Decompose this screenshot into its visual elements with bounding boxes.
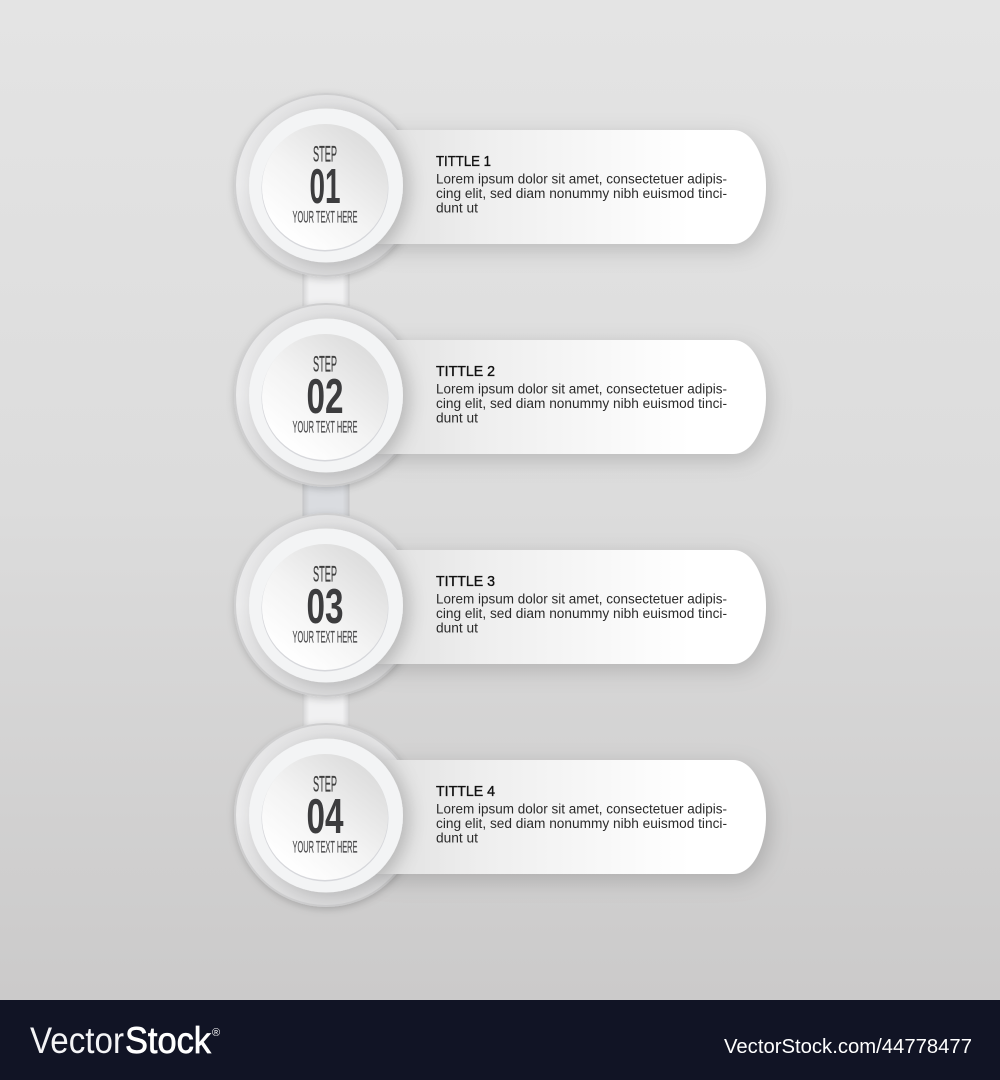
body text 4: cing elit, sed diam nonummy nibh euismod tinci- — [436, 816, 727, 831]
panel 4 — [375, 760, 766, 874]
body text 2: cing elit, sed diam nonummy nibh euismod tinci- — [436, 396, 727, 411]
footer logo: Stock — [125, 1020, 211, 1061]
step 4 — [235, 724, 766, 906]
title 4: TITTLE 4 — [436, 784, 495, 800]
middle disk 4 — [249, 738, 403, 892]
body text 2: dunt ut — [436, 410, 478, 426]
step 1: STEP — [313, 142, 337, 166]
body text 1 — [436, 172, 727, 216]
title 2: TITTLE 2 — [436, 364, 495, 380]
step 2: YOUR TEXT HERE — [292, 418, 358, 436]
outer ring 1 — [235, 94, 417, 276]
outer ring 4 — [235, 724, 417, 906]
body text 4: dunt ut — [436, 830, 478, 846]
step 4: STEP — [313, 772, 337, 796]
panel 1 — [375, 130, 766, 244]
inner disk 3 — [262, 544, 388, 670]
body text 2: Lorem ipsum dolor sit amet, consectetuer adipis- — [436, 382, 727, 396]
step 4: YOUR TEXT HERE — [292, 838, 358, 856]
body text 4 — [436, 802, 727, 846]
body text 4: Lorem ipsum dolor sit amet, consectetuer adipis- — [436, 802, 727, 816]
body text 3: Lorem ipsum dolor sit amet, consectetuer adipis- — [436, 592, 727, 606]
footer bar — [0, 1000, 1000, 1080]
step 1 — [235, 94, 766, 276]
footer url: VectorStock.com/44778477 — [724, 1036, 972, 1058]
connector 1-2 — [303, 270, 349, 312]
step number 1: 01 — [310, 160, 340, 214]
middle disk 1 — [249, 108, 403, 262]
title 1: TITTLE 1 — [436, 154, 491, 170]
step 3 — [235, 514, 766, 696]
middle disk 3 — [249, 528, 403, 682]
outer ring 2 — [235, 304, 417, 486]
inner disk 2 — [262, 334, 388, 460]
inner disk edge 1 — [262, 124, 388, 252]
footer logo: ® — [212, 1027, 220, 1039]
body text 3 — [436, 592, 727, 636]
step 3: YOUR TEXT HERE — [292, 628, 358, 646]
footer logo: Vector — [30, 1020, 124, 1061]
body text 1: Lorem ipsum dolor sit amet, consectetuer adipis- — [436, 172, 727, 186]
inner disk edge 4 — [262, 754, 388, 882]
body text 3: cing elit, sed diam nonummy nibh euismod tinci- — [436, 606, 727, 621]
body text 1: dunt ut — [436, 200, 478, 216]
body text 3: dunt ut — [436, 620, 478, 636]
inner disk edge 2 — [262, 334, 388, 462]
step 2 — [235, 304, 766, 486]
panel 3 — [375, 550, 766, 664]
step 1: YOUR TEXT HERE — [292, 208, 358, 226]
step number 3: 03 — [306, 580, 344, 634]
panel 2 — [375, 340, 766, 454]
middle disk 2 — [249, 318, 403, 472]
inner disk 1 — [262, 124, 388, 250]
connector 3-4 — [303, 690, 349, 732]
step 3: STEP — [313, 562, 337, 586]
inner disk edge 3 — [262, 544, 388, 672]
step number 2: 02 — [306, 370, 344, 424]
outer ring 3 — [235, 514, 417, 696]
body text 1: cing elit, sed diam nonummy nibh euismod tinci- — [436, 186, 727, 201]
footer logo — [30, 1020, 220, 1061]
step number 4: 04 — [306, 790, 344, 844]
title 3: TITTLE 3 — [436, 574, 495, 590]
connector 2-3 — [303, 480, 349, 522]
inner disk 4 — [262, 754, 388, 880]
body text 2 — [436, 382, 727, 426]
step 2: STEP — [313, 352, 337, 376]
